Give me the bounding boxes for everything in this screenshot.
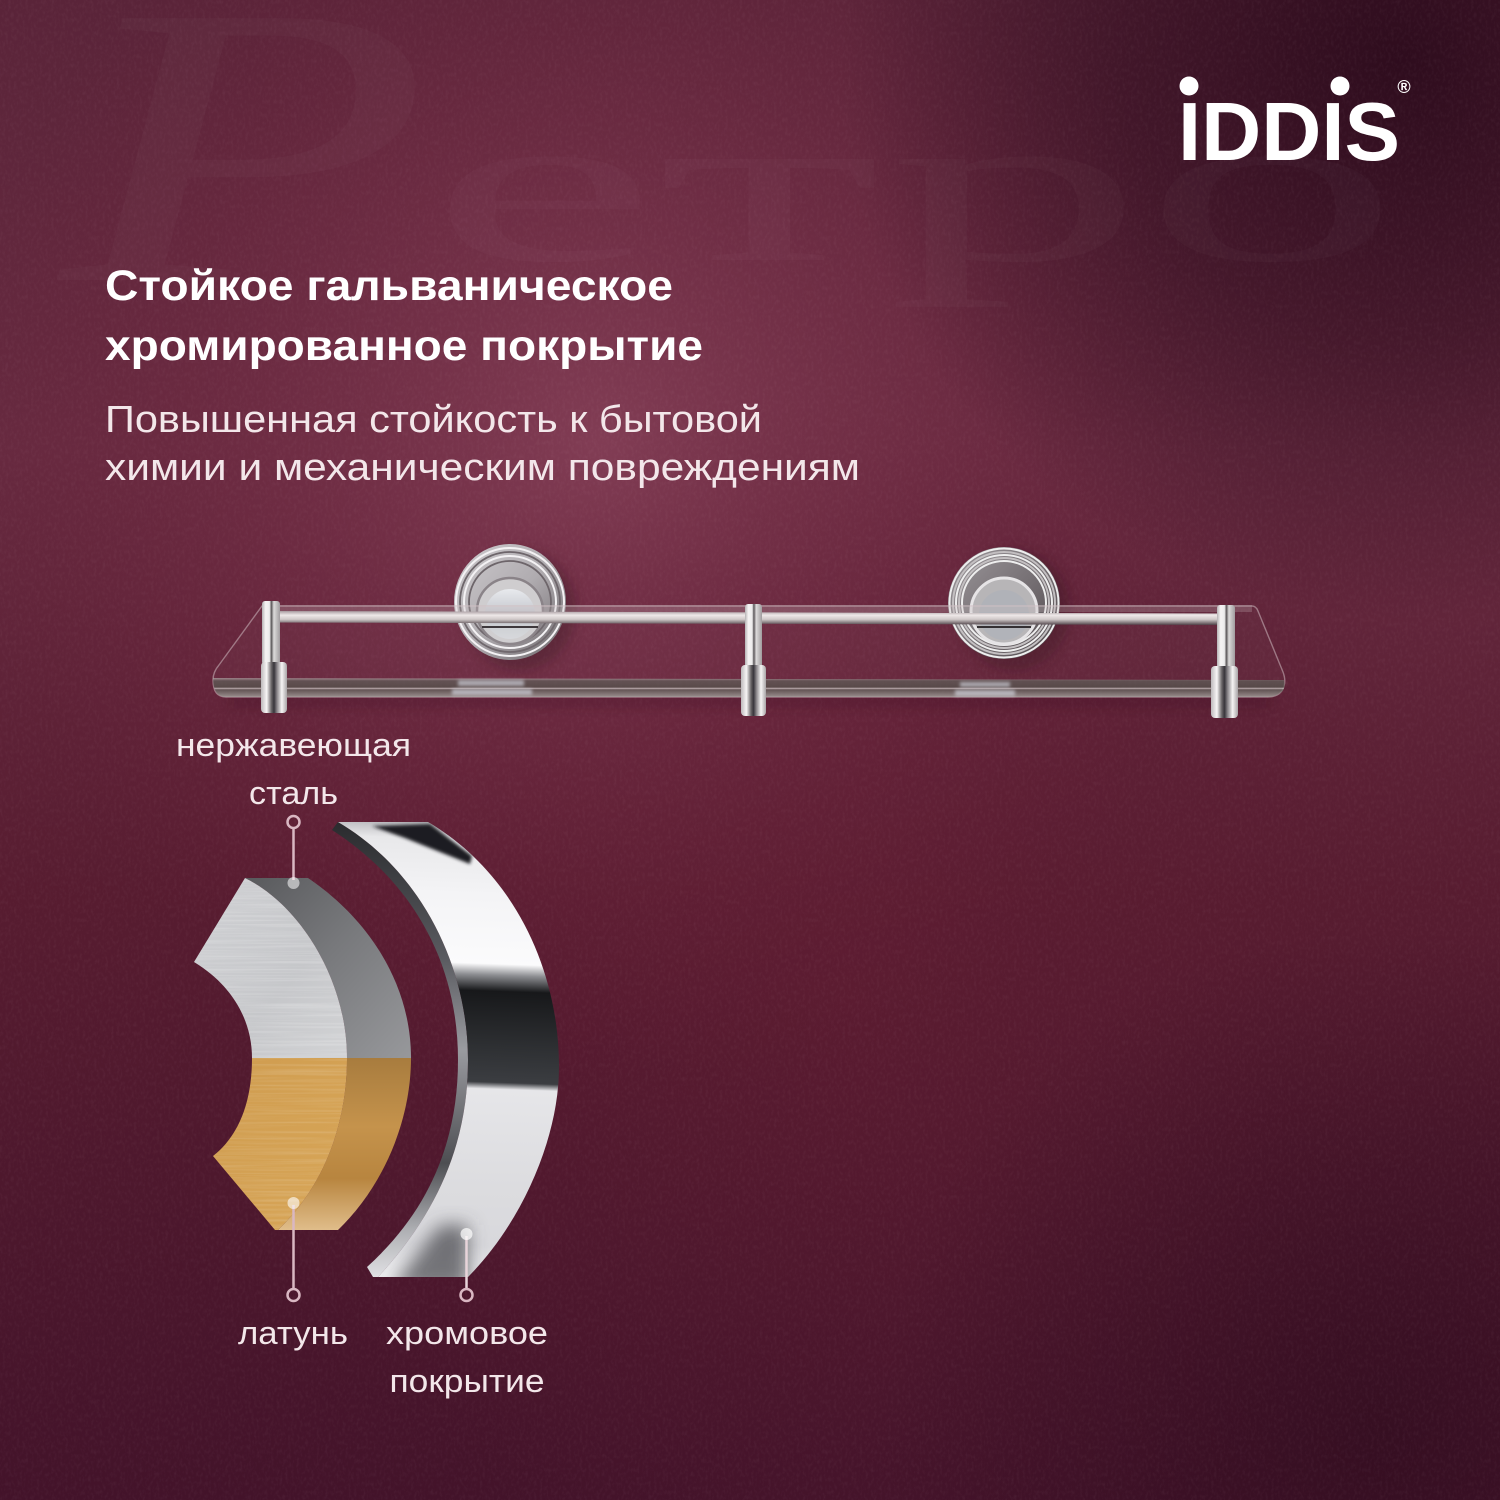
post middle xyxy=(741,604,766,716)
callout: chrome coating: хромовое xyxy=(386,1315,548,1351)
callout: brass: латунь xyxy=(238,1315,348,1351)
brass layer xyxy=(213,1058,411,1230)
glass back edge xyxy=(262,605,1252,612)
glass shelf with rail xyxy=(213,544,1285,718)
heading: Стойкое гальваническое xyxy=(105,262,673,310)
callout: stainless steel xyxy=(176,727,411,889)
wall mount right xyxy=(948,547,1060,659)
wall mount left xyxy=(454,544,566,660)
heading: хромированное покрытие xyxy=(105,322,703,370)
subheading: химии и механическим повреждениям xyxy=(105,447,860,489)
heading xyxy=(105,262,703,370)
material layers cross-section xyxy=(194,822,559,1290)
chrome layer xyxy=(332,822,559,1290)
watermark script word: етро xyxy=(430,64,1400,308)
front edge reflections xyxy=(452,680,1015,696)
shelf shadow xyxy=(230,550,1270,705)
logo: iddis: IDDIS xyxy=(1178,85,1400,178)
post right xyxy=(1211,605,1238,718)
callout: stainless steel: сталь xyxy=(249,775,338,811)
glass front edge xyxy=(213,678,1284,697)
steel layer xyxy=(194,878,411,1058)
watermark script word xyxy=(51,0,1400,367)
glass pane xyxy=(213,606,1285,697)
subheading xyxy=(105,399,860,489)
callout: chrome coating: покрытие xyxy=(390,1363,544,1399)
logo: iddis: ® xyxy=(1397,77,1411,97)
post left xyxy=(261,601,287,713)
callout: stainless steel: нержавеющая xyxy=(176,727,411,763)
callout: brass xyxy=(238,1197,348,1351)
callout: chrome coating xyxy=(386,1228,548,1399)
rail xyxy=(272,611,1224,625)
subheading: Повышенная стойкость к бытовой xyxy=(105,399,762,441)
